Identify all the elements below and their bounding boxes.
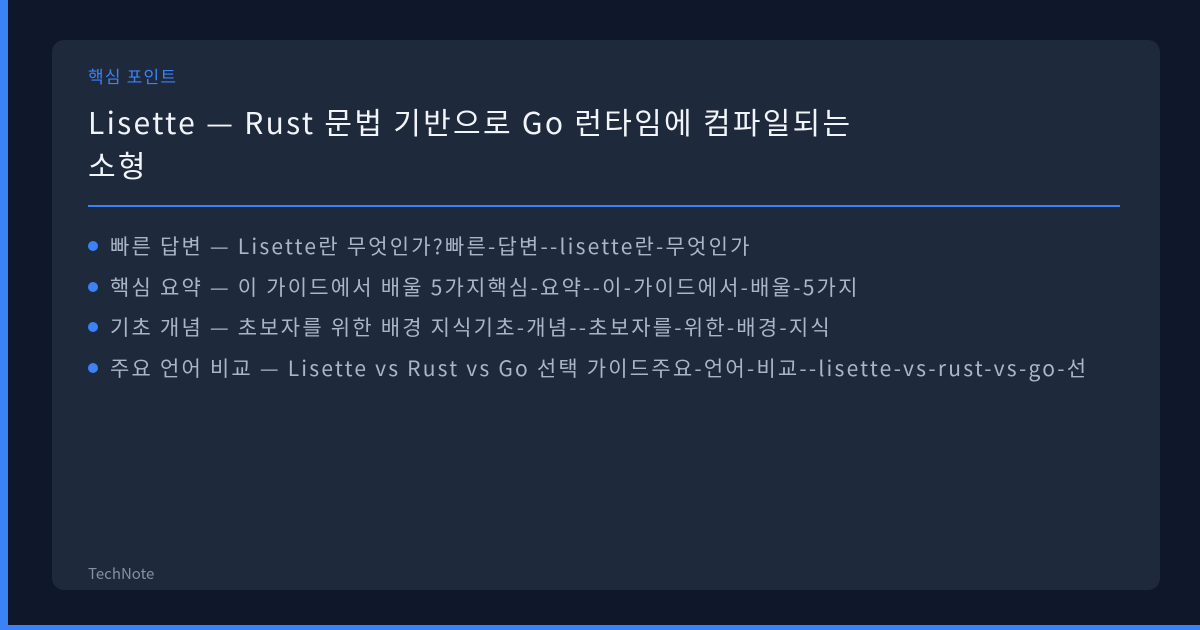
footer brand: TechNote	[88, 563, 154, 584]
kicker label: 핵심 포인트	[88, 63, 177, 88]
title: Lisette — Rust 문법 기반으로 Go 런타임에 컴파일되는 소형	[88, 99, 852, 186]
bullet 4: 주요 언어 비교 — Lisette vs Rust vs Go 선택 가이드주요-언어-비교--lisette-vs-rust-vs-go-선	[110, 352, 1088, 382]
bottom accent bar	[0, 625, 1200, 630]
left accent bar	[0, 0, 8, 630]
bullet list	[88, 231, 1088, 382]
bullet 2: 핵심 요약 — 이 가이드에서 배울 5가지핵심-요약--이-가이드에서-배울-5가지	[110, 272, 860, 302]
bullet 1: 빠른 답변 — Lisette란 무엇인가?빠른-답변--lisette란-무엇인가	[110, 231, 752, 261]
bullet 3: 기초 개념 — 초보자를 위한 배경 지식기초-개념--초보자를-위한-배경-지식	[110, 312, 832, 342]
